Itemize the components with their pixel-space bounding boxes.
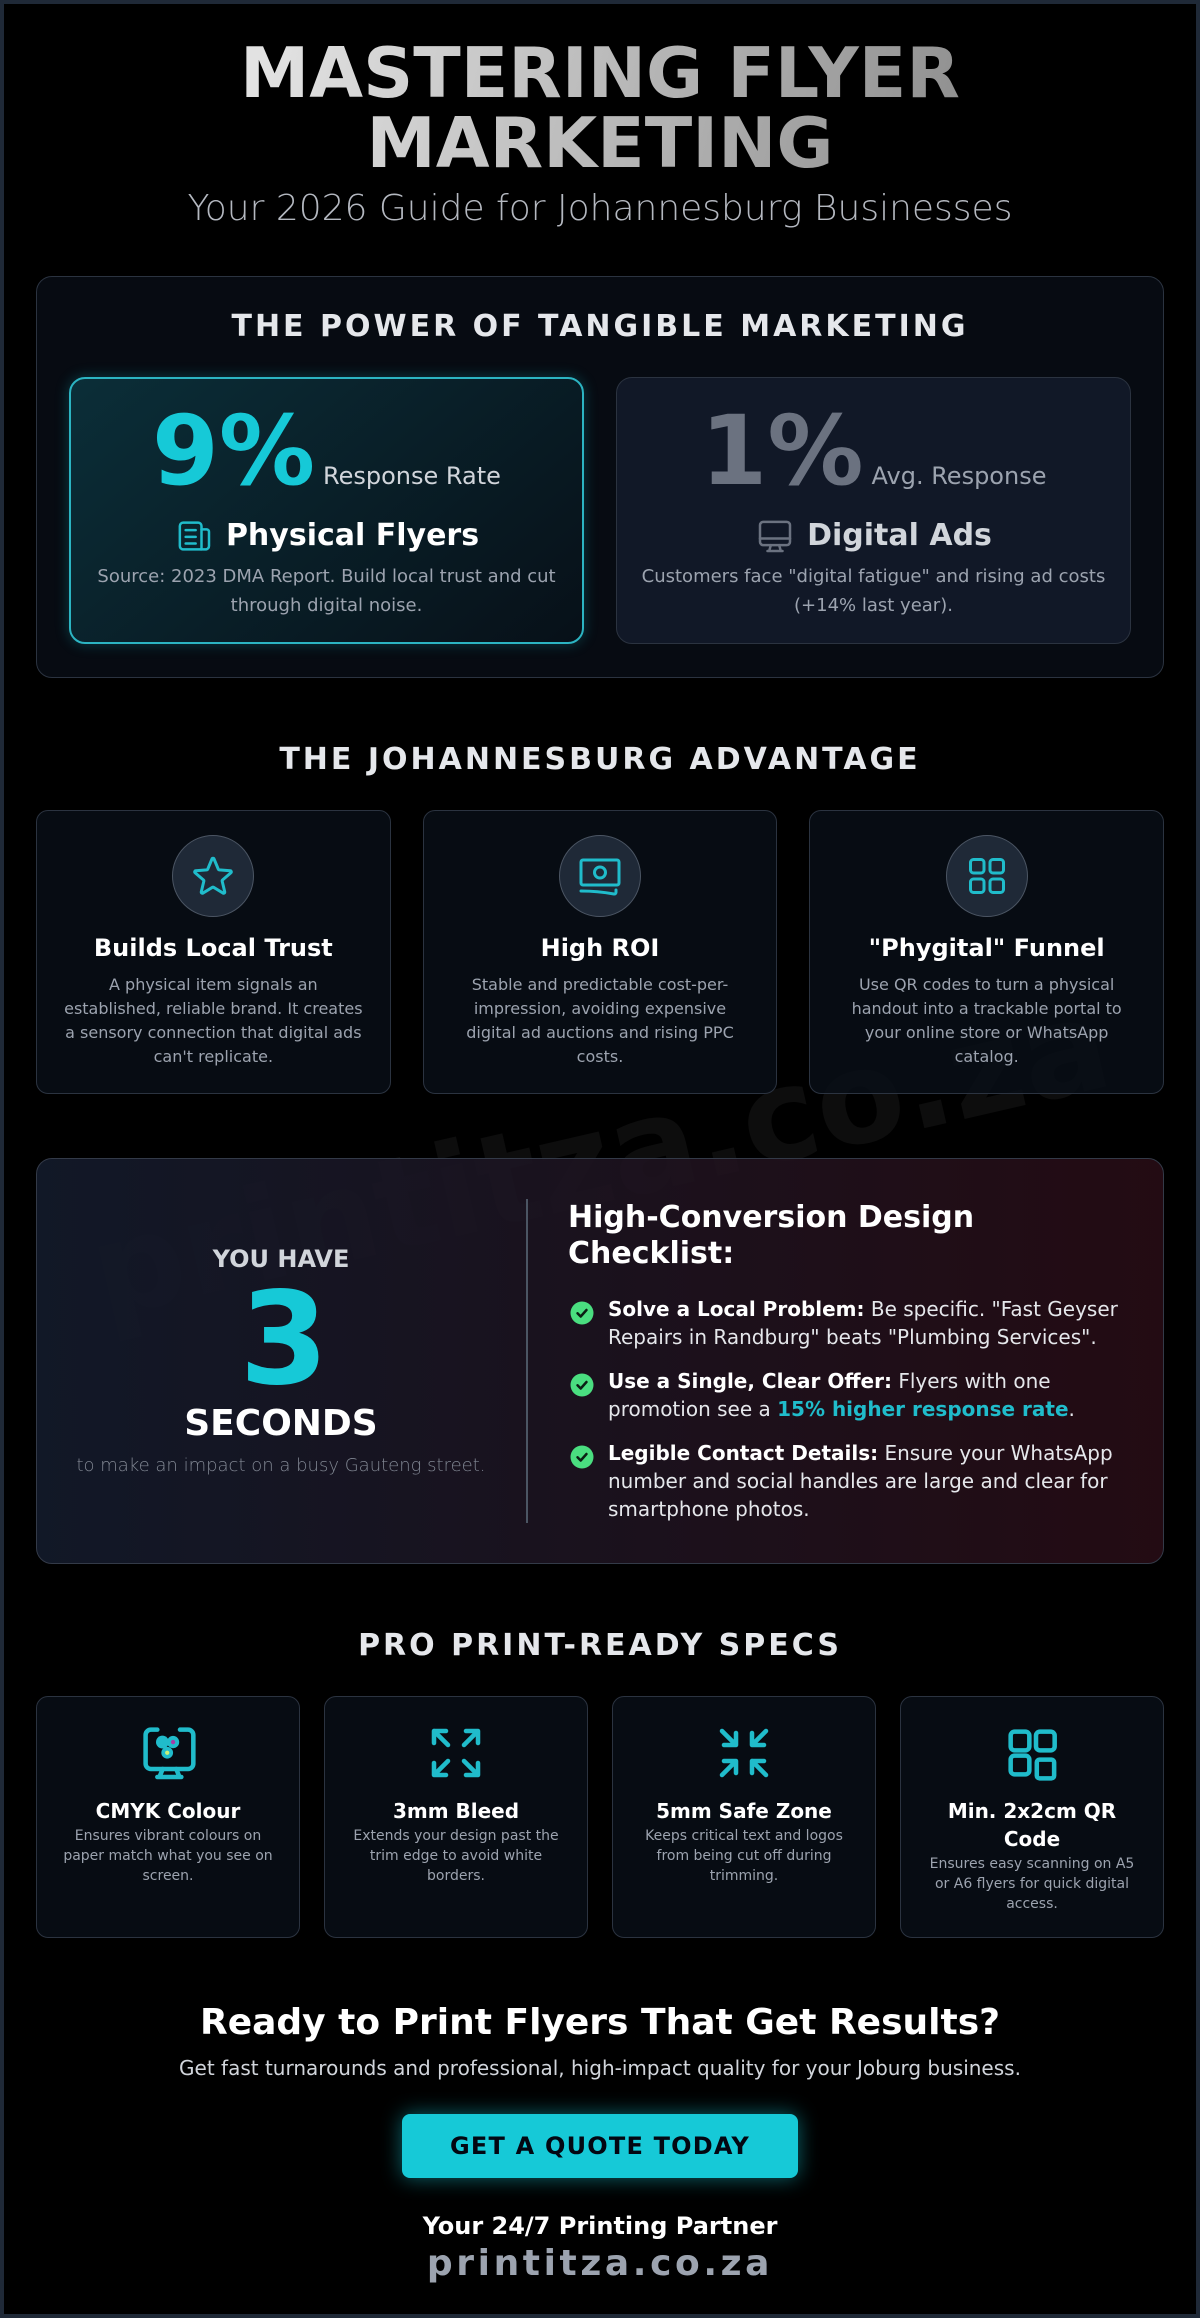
- text: roi description: Stable and predictable cost-per-: [472, 975, 728, 994]
- title: builds local trust: Builds Local Trust: [94, 934, 333, 962]
- text: trust description: can't replicate.: [154, 1047, 273, 1066]
- card: cmyk colour: [36, 1696, 300, 1938]
- icon: qr squares: [1008, 1729, 1057, 1781]
- title: MASTERING FLYER: [240, 33, 960, 114]
- text: phygital description: handout into a trackable portal to: [852, 999, 1122, 1018]
- text: bleed description: trim edge to avoid white: [370, 1848, 542, 1864]
- title: qr code: Code: [1004, 1827, 1060, 1851]
- text: roi description: costs.: [577, 1047, 623, 1066]
- button: get a quote today: GET A QUOTE TODAY: [450, 2132, 750, 2160]
- icon: star: [172, 835, 254, 917]
- title: cmyk colour: CMYK Colour: [96, 1799, 240, 1823]
- icon: check 2: [570, 1374, 594, 1396]
- text: qr description: or A6 flyers for quick digital: [935, 1876, 1129, 1892]
- text: digital ads note: [642, 566, 1105, 616]
- label: you have: YOU HAVE: [213, 1245, 349, 1273]
- stat: 1% avg response: 1%: [701, 395, 864, 507]
- text: phygital description: Use QR codes to turn a physical: [859, 975, 1114, 994]
- text: cmyk description: paper match what you see on: [63, 1848, 273, 1864]
- text: roi description: [466, 975, 734, 1066]
- card: high roi: [423, 810, 777, 1094]
- text: safe zone description: [645, 1828, 843, 1884]
- cta subtext: Get fast turnarounds and professional, high-impact quality for your Joburg business.: [179, 2056, 1021, 2080]
- text: safe zone description: trimming.: [710, 1868, 778, 1884]
- heading: design checklist: High-Conversion Design: [568, 1200, 974, 1235]
- text: single clear offer: promotion see a 15% higher response rate.: [608, 1397, 1075, 1421]
- text: legible contact details: Legible Contact Details: Ensure your WhatsApp: [608, 1441, 1113, 1465]
- block: 3 seconds: [76, 1245, 486, 1476]
- text: safe zone description: from being cut off during: [657, 1848, 831, 1864]
- text: digital ads note: Customers face "digital fatigue" and rising ad costs: [642, 566, 1105, 587]
- text: trust description: a sensory connection that digital ads: [65, 1023, 362, 1042]
- text: solve a local problem: [608, 1297, 1118, 1349]
- icon: check 1: [570, 1302, 594, 1324]
- watermark: printitza.co.za: [77, 969, 1123, 1348]
- text: physical flyers source: through digital noise.: [231, 595, 422, 616]
- text: qr description: Ensures easy scanning on A5: [930, 1856, 1134, 1872]
- icon: arrows in: [720, 1728, 768, 1778]
- footer brand: printitza.co.za: [427, 2243, 773, 2284]
- text: bleed description: [353, 1828, 559, 1884]
- text: cmyk description: screen.: [142, 1868, 194, 1884]
- vertical divider: [526, 1199, 528, 1523]
- icon: arrows out: [432, 1728, 480, 1778]
- text: trust description: established, reliable brand. It creates: [64, 999, 363, 1018]
- text: physical flyers source: Source: 2023 DMA Report. Build local trust and cut: [97, 566, 556, 587]
- text: solve a local problem: Solve a Local Problem: Be specific. "Fast Geyser: [608, 1297, 1118, 1321]
- text: digital ads note: (+14% last year).: [794, 595, 953, 616]
- footer tagline: Your 24/7 Printing Partner: [423, 2212, 777, 2240]
- card: 5mm safe zone: [612, 1696, 876, 1938]
- title: qr code: [948, 1799, 1116, 1851]
- title: high roi: High ROI: [541, 934, 659, 962]
- title: 3mm bleed: 3mm Bleed: [393, 1799, 519, 1823]
- title: qr code: Min. 2x2cm QR: [948, 1799, 1116, 1823]
- text: roi description: digital ad auctions and rising PPC: [466, 1023, 734, 1042]
- text: trust description: [64, 975, 363, 1066]
- text: qr description: [930, 1856, 1134, 1912]
- text: impact note: to make an impact on a busy Gauteng street.: [76, 1455, 486, 1476]
- text: phygital description: your online store or WhatsApp: [865, 1023, 1108, 1042]
- icon: cmyk monitor: [143, 1727, 196, 1780]
- text: legible contact details: number and social handles are large and clear for: [608, 1469, 1108, 1493]
- text: legible contact details: [608, 1441, 1113, 1521]
- subtitle: Your 2026 Guide for Johannesburg Businesses: [188, 188, 1012, 228]
- title: MARKETING: [367, 103, 833, 184]
- heading: tangible marketing: THE POWER OF TANGIBLE MARKETING: [231, 309, 968, 344]
- stat: 9% response rate: 9%: [152, 395, 315, 507]
- text: roi description: impression, avoiding expensive: [474, 999, 726, 1018]
- stat: 1% avg response: Avg. Response: [872, 462, 1046, 490]
- card: phygital funnel: [809, 810, 1164, 1094]
- panel: the power of tangible marketing: [36, 276, 1164, 678]
- label: digital ads: Digital Ads: [807, 518, 992, 553]
- card: 3mm bleed: [324, 1696, 588, 1938]
- heading: design checklist: Checklist:: [568, 1236, 734, 1271]
- icon: newspaper: [178, 521, 210, 551]
- cta heading: Ready to Print Flyers That Get Results?: [200, 2002, 1000, 2043]
- text: trust description: A physical item signals an: [109, 975, 318, 994]
- heading: print-ready specs: PRO PRINT-READY SPECS: [358, 1628, 842, 1663]
- heading: johannesburg advantage: THE JOHANNESBURG ADVANTAGE: [279, 742, 921, 777]
- number: 3: 3: [239, 1265, 329, 1414]
- text: single clear offer: [608, 1369, 1075, 1421]
- text: cmyk description: Ensures vibrant colours on: [75, 1828, 261, 1844]
- label: physical flyers: Physical Flyers: [226, 518, 479, 553]
- stat: 9% response rate: [152, 395, 501, 507]
- card: builds local trust: [36, 810, 391, 1094]
- icon: monitor: [758, 520, 792, 552]
- text: phygital description: catalog.: [955, 1047, 1019, 1066]
- button: get a quote today: [402, 2114, 798, 2178]
- text: safe zone description: Keeps critical text and logos: [645, 1828, 843, 1844]
- card: digital ads 1 percent: [616, 377, 1131, 644]
- text: qr description: access.: [1006, 1896, 1058, 1912]
- panel: three seconds and checklist: [36, 1158, 1164, 1564]
- text: bleed description: Extends your design past the: [353, 1828, 559, 1844]
- text: cmyk description: [63, 1828, 273, 1884]
- text: single clear offer: Use a Single, Clear Offer: Flyers with one: [608, 1369, 1051, 1393]
- text: phygital description: [852, 975, 1122, 1066]
- text: legible contact details: smartphone photos.: [608, 1497, 810, 1521]
- card: physical flyers 9 percent: [69, 377, 584, 644]
- text: bleed description: borders.: [427, 1868, 485, 1884]
- icon: banknote: [559, 835, 641, 917]
- icon: grid: [946, 835, 1028, 917]
- stat: 1% avg response: [701, 395, 1046, 507]
- stat: 9% response rate: Response Rate: [323, 462, 501, 490]
- card: qr code: [900, 1696, 1164, 1938]
- title: 5mm safe zone: 5mm Safe Zone: [656, 1799, 832, 1823]
- icon: check 3: [570, 1446, 594, 1468]
- label: seconds: SECONDS: [184, 1403, 378, 1444]
- title: phygital funnel: "Phygital" Funnel: [869, 934, 1105, 962]
- text: physical flyers source: [97, 566, 556, 616]
- heading: design checklist: [568, 1200, 974, 1271]
- text: solve a local problem: Repairs in Randburg" beats "Plumbing Services".: [608, 1325, 1097, 1349]
- title: [0, 39, 1200, 179]
